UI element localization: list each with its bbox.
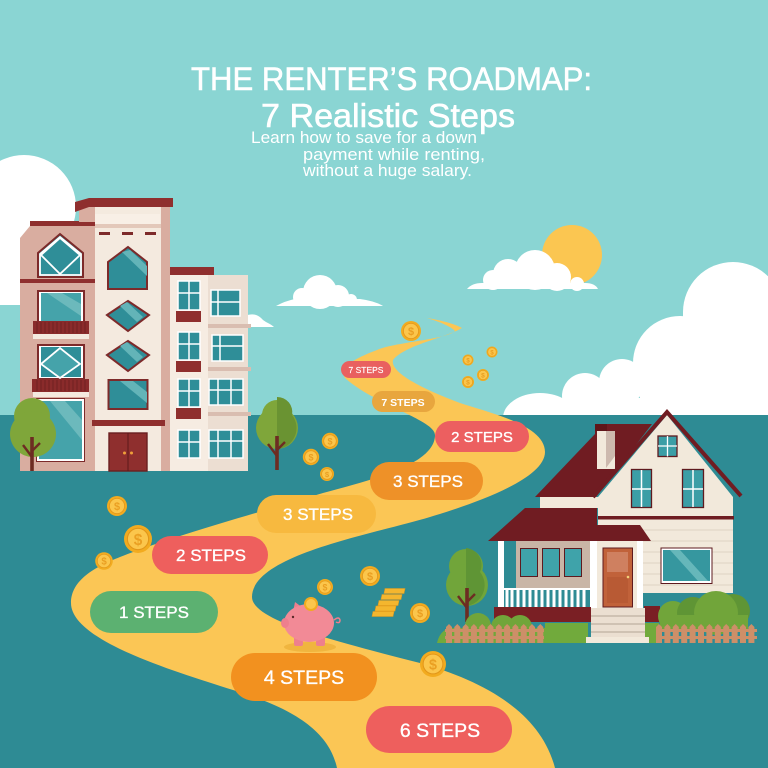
sky background (0, 0, 768, 416)
step pill: 2 steps upper (435, 421, 529, 452)
step pill: 4 steps: 4 STEPS (264, 667, 344, 689)
porch roof (488, 508, 651, 541)
coins scattered (95, 321, 497, 677)
subtitle: payment while renting, (303, 145, 485, 164)
step pill: 3 steps orange: 3 STEPS (393, 472, 463, 491)
tree: right of apartment (256, 397, 298, 470)
large window (660, 548, 712, 584)
step pill: 7 steps amber: 7 STEPS (381, 397, 425, 409)
title: 7 Realistic Steps (261, 97, 515, 134)
step pill: 3 steps yellow (257, 495, 376, 533)
cloud: large right (503, 262, 768, 443)
step pill: 6 steps (366, 706, 512, 753)
step pill: 2 steps upper: 2 STEPS (451, 429, 513, 446)
porch windows (520, 548, 582, 576)
title (191, 61, 592, 134)
step pill: 2 steps lower: 2 STEPS (176, 546, 246, 565)
fence left (445, 624, 544, 643)
tree: left of apartment (10, 398, 56, 471)
step pill: 6 steps: 6 STEPS (400, 720, 480, 742)
tree beside porch (446, 548, 488, 622)
house body (598, 415, 733, 593)
step pill: 7 steps small red (341, 361, 391, 378)
bushes (465, 591, 750, 639)
door (603, 548, 632, 607)
gold coin stack (372, 588, 405, 616)
left wing (20, 221, 95, 471)
subtitle: Learn how to save for a down (251, 128, 477, 147)
title: THE RENTER’S ROADMAP: (191, 61, 592, 97)
dormer and upper windows (632, 436, 704, 508)
subtitle (251, 128, 485, 180)
right wing (170, 267, 251, 471)
main roof (535, 424, 652, 497)
chimney (595, 424, 615, 469)
step pill: 3 steps yellow: 3 STEPS (283, 505, 353, 524)
cloud: beside sun (467, 250, 598, 291)
step pill: 7 steps small red: 7 STEPS (349, 365, 384, 375)
step pill: 7 steps amber (372, 391, 435, 412)
railing (503, 588, 590, 607)
foundation (494, 606, 660, 622)
sun (542, 225, 602, 285)
cloud: left large (0, 155, 76, 305)
step pill: 3 steps orange (370, 462, 483, 500)
fence right (656, 624, 757, 643)
ground (0, 415, 768, 768)
pillars (498, 541, 643, 608)
apartment building (20, 198, 251, 471)
step pill: 4 steps (231, 653, 377, 701)
cloud: small centre (276, 275, 383, 309)
steps (586, 608, 649, 643)
road (71, 318, 555, 768)
central tower (75, 198, 173, 471)
piggy bank (281, 597, 340, 652)
step pill: 1 steps green: 1 STEPS (119, 603, 189, 622)
house (437, 412, 757, 643)
step pill: 2 steps lower (152, 536, 268, 574)
porch wall (516, 540, 591, 590)
grass (437, 623, 659, 643)
porch front wall (590, 540, 643, 608)
step pill: 1 steps green (90, 591, 218, 633)
gable edge (593, 412, 741, 497)
subtitle: without a huge salary. (302, 161, 472, 180)
cloud: small behind building (245, 314, 274, 327)
